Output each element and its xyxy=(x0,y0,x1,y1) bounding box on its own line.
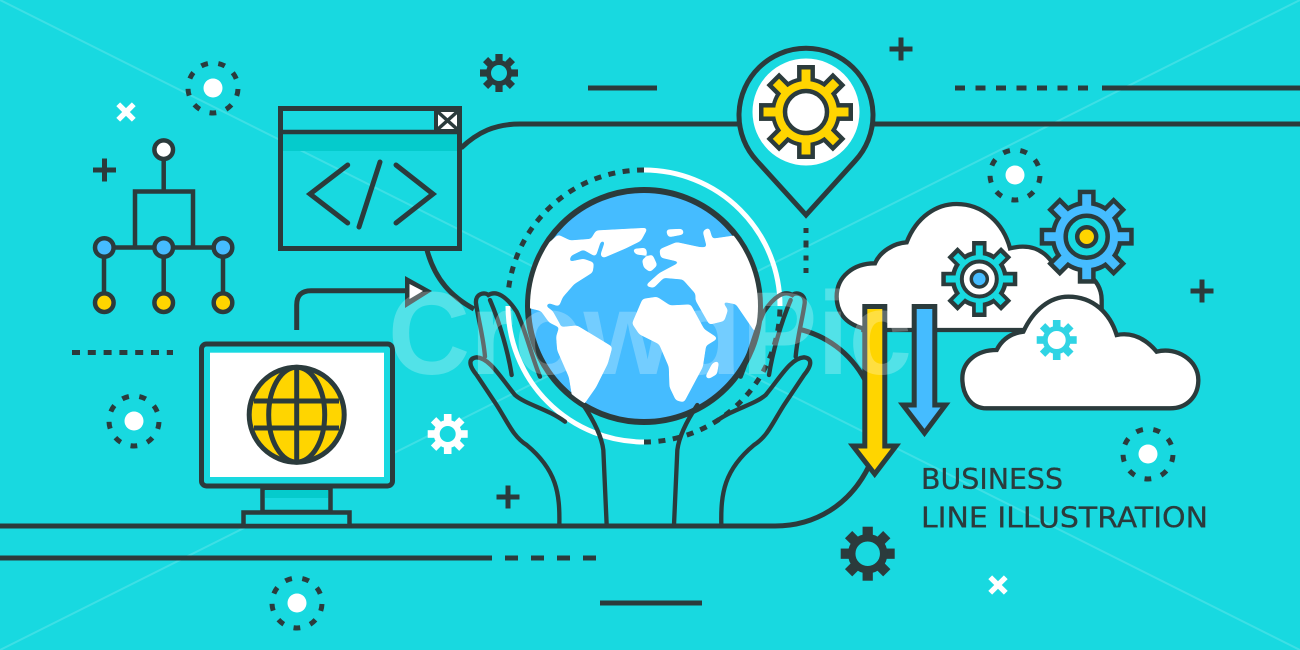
monitor xyxy=(202,344,392,526)
continents xyxy=(520,229,767,403)
cloud gear teal xyxy=(941,241,1017,317)
connector lines xyxy=(0,88,1300,603)
title text xyxy=(921,463,1208,534)
org chart xyxy=(95,140,232,312)
arrow from monitor xyxy=(297,276,432,330)
globe xyxy=(520,190,767,422)
watermark: CrowdPic xyxy=(388,268,912,400)
arrow yellow xyxy=(853,306,896,474)
hands xyxy=(470,293,810,525)
small gears xyxy=(428,54,895,581)
orbit ring around globe xyxy=(508,170,780,442)
cloud front xyxy=(962,297,1198,408)
close button xyxy=(434,108,460,133)
arrow blue xyxy=(903,306,946,433)
title text: BUSINESS xyxy=(921,463,1063,496)
plus and cross marks xyxy=(93,38,1214,595)
gear blue xyxy=(1040,190,1134,284)
left hand xyxy=(470,293,607,525)
cloud gear small xyxy=(1037,320,1077,360)
right hand xyxy=(674,293,810,525)
code brackets xyxy=(310,162,433,227)
code window xyxy=(280,108,460,248)
web globe icon xyxy=(249,367,344,462)
cloud back xyxy=(837,204,1102,330)
title text: LINE ILLUSTRATION xyxy=(921,502,1208,534)
dashed rings xyxy=(109,63,1173,628)
location pin with gear xyxy=(739,48,873,215)
